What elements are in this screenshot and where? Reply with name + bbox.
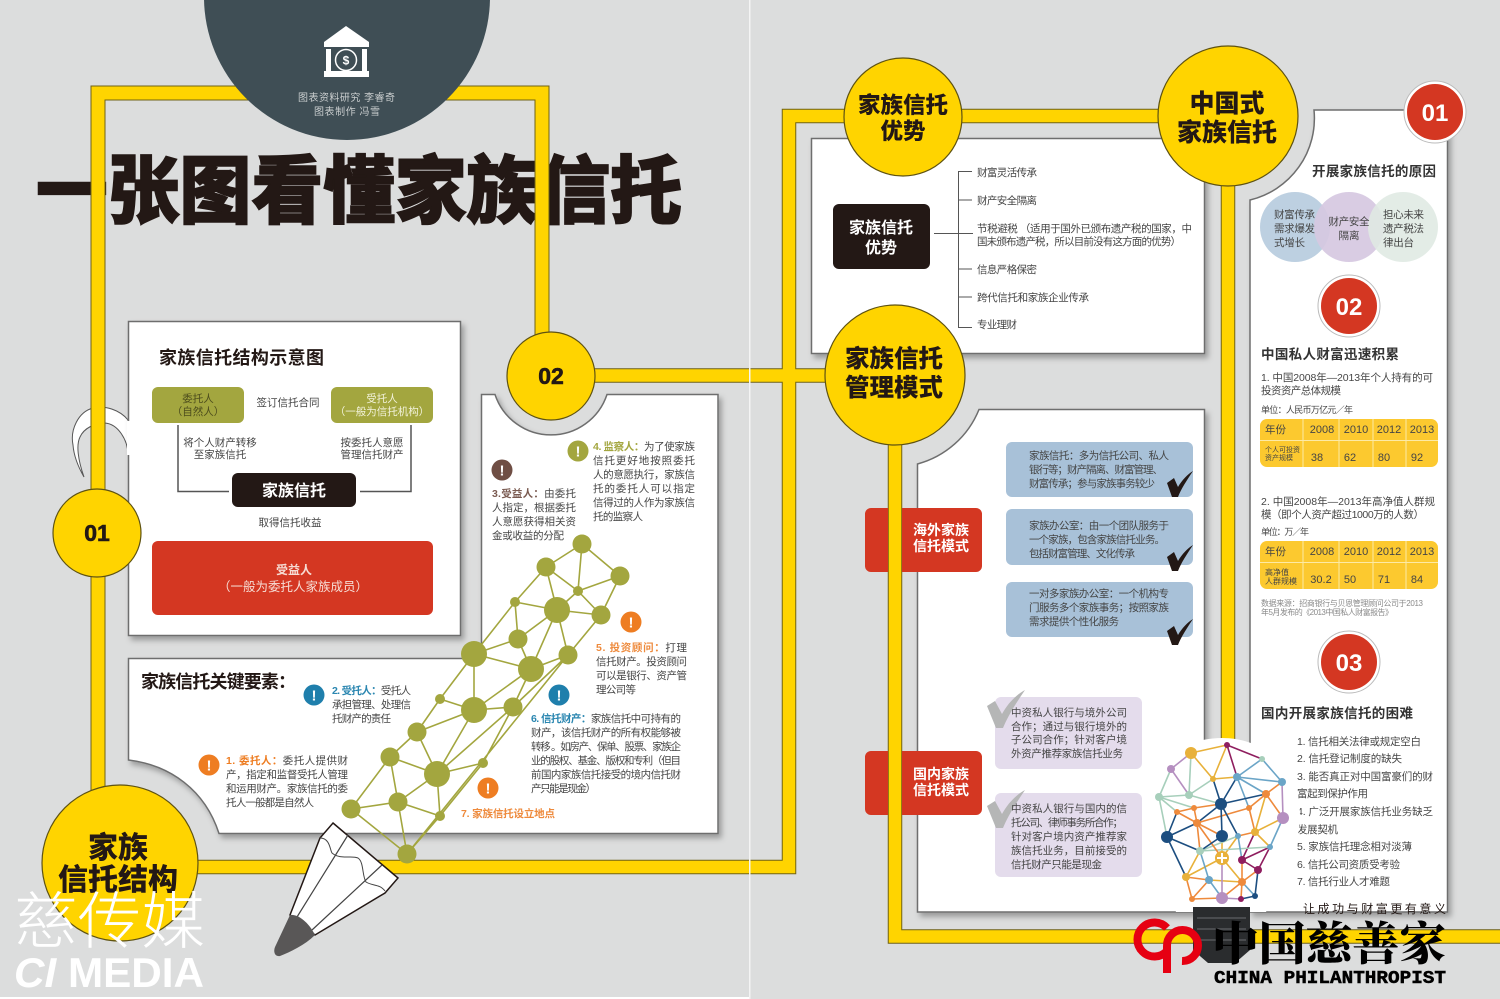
list: difficulties: 富起到保护作用	[1297, 787, 1368, 800]
watermark: CI Media: 慈传媒	[14, 871, 205, 961]
circle: China-style family trust: 家族信托	[1177, 118, 1277, 147]
element 5: investment adviser: 理公司等	[596, 683, 636, 696]
badge: 03: 03	[1336, 650, 1362, 677]
element 4: supervisor: 托的委托人可以指定	[593, 482, 696, 495]
element 4: supervisor: 人的意愿执行，家族信	[593, 468, 695, 481]
badge: 02: 02	[1336, 294, 1362, 321]
element 3: beneficiary: 金或收益的分配	[492, 529, 564, 542]
circle: management models: 家族信托	[845, 344, 943, 373]
panel: trust structure diagram: 至家族信托	[194, 448, 247, 461]
icon: bank	[324, 26, 369, 77]
table: assets: 38	[1311, 452, 1323, 464]
text: high net worth: 2. 中国2008年—2013年高净值人群规	[1261, 495, 1436, 508]
box: settlor: （自然人）	[172, 405, 224, 418]
heading: wealth: 中国私人财富迅速积累	[1261, 346, 1399, 362]
box: trustee: 受托人	[366, 392, 398, 405]
purple card 1	[987, 690, 1142, 769]
box: advantages: 优势	[865, 238, 897, 257]
advantages list: 财富灵活传承	[977, 166, 1038, 179]
text: data source	[1261, 598, 1424, 617]
panel: trust structure diagram: 签订信托合同	[256, 396, 320, 409]
element 6: trust property: !	[556, 688, 562, 704]
venn circles: reasons: 财产安全	[1328, 215, 1370, 228]
bulb socket	[1193, 907, 1250, 963]
advantages list: 国未颁布遗产税，所以目前没有这方面的优势）	[977, 235, 1181, 248]
table: high net worth: 71	[1378, 574, 1390, 586]
element 6: trust property: 6. 信托财产：家族信托中可持有的	[531, 712, 681, 725]
blue card 3: 门服务多个家族事务；按照家族	[1029, 601, 1170, 614]
element 2: trustee	[304, 684, 412, 725]
label: overseas model	[865, 508, 982, 572]
panel: trust structure diagram	[127, 322, 460, 636]
blue card 2: 包括财富管理、文化传承	[1029, 547, 1136, 560]
header badge with bank icon and credits: 图表资料研究 李睿奇	[298, 91, 395, 104]
purple card 1: 外资产推荐家族信托业务	[1011, 747, 1124, 760]
circle: management models	[825, 305, 965, 445]
purple card 2: 托公司、律师事务所合作；	[1011, 816, 1123, 829]
panel: trust structure diagram: 按委托人意愿	[340, 436, 404, 449]
list: difficulties: 4. 广泛开展家族信托业务缺乏	[1297, 805, 1434, 818]
purple card 1: 中资私人银行与境外公司	[1011, 706, 1127, 719]
heading: difficulties: 国内开展家族信托的困难	[1261, 705, 1414, 721]
label: overseas model: 信托模式	[913, 538, 969, 554]
purple card 2: 针对客户境内资产推荐家	[1011, 830, 1128, 843]
table: high net worth: 2010	[1344, 546, 1368, 558]
blue card 2: 一个家族，包含家族信托业务。	[1029, 533, 1165, 546]
advantages list: 节税避税 （适用于国外已颁布遗产税的国家，中	[977, 222, 1192, 235]
list: difficulties: 1. 信托相关法律或规定空白	[1297, 735, 1421, 748]
element 5: investment adviser	[596, 612, 688, 696]
table: high net worth: 2012	[1377, 546, 1401, 558]
element 5: investment adviser: 信托财产。投资顾问	[596, 655, 687, 668]
element 7: place of establishment: !	[486, 780, 490, 798]
text: assets: 单位：人民币万亿元／年	[1261, 404, 1353, 415]
panel: key elements	[128, 394, 718, 864]
badge: 02	[1318, 275, 1380, 337]
box: settlor: 委托人	[182, 392, 214, 405]
advantages list: 跨代信托和家族企业传承	[977, 291, 1090, 304]
blue card 2: 家族办公室：由一个团队服务于	[1029, 519, 1169, 532]
element 3: beneficiary: !	[500, 462, 504, 480]
badge: 01: 01	[1422, 100, 1448, 127]
text: high net worth: 模（即个人资产超过1000万的人数）	[1261, 508, 1424, 521]
venn circles: reasons: 需求爆发	[1274, 222, 1316, 235]
panel: trust structure diagram: 将个人财产转移	[183, 436, 257, 449]
element 4: supervisor: 4. 监察人：为了使家族	[593, 440, 696, 453]
element 6: trust property: 前国内家族信托接受的境内信托财	[531, 768, 681, 781]
panel: management models	[918, 410, 1204, 912]
text: assets: 投资资产总体规模	[1261, 384, 1342, 397]
element 4: supervisor: 信托更好地按照委托	[593, 454, 696, 467]
table: high net worth: 2008	[1310, 546, 1334, 558]
venn circles: reasons	[1260, 192, 1438, 262]
circle: 01: 01	[84, 520, 110, 546]
label: domestic model: 国内家族	[913, 766, 969, 782]
element 4: supervisor: 托的监察人	[593, 510, 644, 523]
element 1: settlor: 产，指定和监督受托人管理	[226, 768, 348, 781]
element 1: settlor	[198, 754, 348, 809]
logo: China Philanthropist: CHINA PHILANTHROPIST	[1214, 969, 1446, 989]
circle: family trust structure: 家族	[88, 831, 148, 865]
icon: pencil	[274, 823, 398, 956]
element 6: trust property: 产只能是现金）	[531, 782, 596, 795]
element 1: settlor: 和运用财产。家族信托的委	[226, 782, 348, 795]
venn circles: reasons: 担心未来	[1383, 209, 1424, 221]
panel: trust structure diagram: 取得信托收益	[258, 516, 322, 529]
purple card 1: 子公司合作；针对客户境	[1011, 733, 1127, 746]
label: domestic model: 信托模式	[913, 782, 969, 798]
element 1: settlor: !	[206, 758, 212, 774]
circle: 02: 02	[538, 363, 564, 389]
table: high net worth: 30.2	[1310, 574, 1332, 586]
crescent behind panel	[72, 407, 128, 477]
label: overseas model: 海外家族	[913, 522, 969, 538]
element 4: supervisor	[568, 440, 696, 523]
badge: 01	[1404, 81, 1466, 143]
blue card 2	[1006, 509, 1193, 571]
table: high net worth: 50	[1344, 574, 1356, 586]
text: data source: 年5月发布的《2013中国私人财富报告》	[1261, 607, 1393, 617]
circle: China-style family trust: 中国式	[1189, 90, 1265, 118]
advantages list: 专业理财	[977, 318, 1017, 331]
purple card 1: 合作；通过与银行境外的	[1011, 720, 1127, 733]
table: assets: 2008	[1310, 424, 1334, 436]
table: assets: 80	[1378, 452, 1390, 464]
element 2: trustee: 托财产的责任	[332, 712, 392, 725]
yellow connector lines	[98, 93, 1500, 936]
element 2: trustee: 承担管理、处理信	[332, 698, 411, 711]
list: difficulties: 3. 能否真正对中国富豪们的财	[1297, 770, 1433, 783]
element 3: beneficiary: 人指定，根据委托	[492, 501, 576, 514]
logo: China Philanthropist: 让成功与财富更有意义	[1303, 901, 1446, 916]
blue card 1	[1006, 442, 1193, 497]
list: difficulties: 7. 信托行业人才难题	[1297, 875, 1390, 888]
title: 一张图看懂家族信托	[36, 150, 682, 233]
text: high net worth: 单位：万／年	[1261, 526, 1309, 537]
element 6: trust property: 转移 。如房产、保单、股票、家族企	[531, 740, 682, 753]
table: high net worth	[1260, 541, 1438, 589]
purple card 2: 中资私人银行与国内的信	[1011, 802, 1127, 815]
list: difficulties: 2. 信托登记制度的缺失	[1297, 752, 1402, 765]
list: difficulties	[1297, 735, 1434, 888]
table: high net worth: 84	[1411, 574, 1423, 586]
box: family trust: 家族信托	[262, 481, 326, 500]
element 7: place of establishment: 7. 家族信托设立地点	[461, 807, 556, 820]
purple card 2	[987, 790, 1142, 877]
element 6: trust property	[531, 684, 682, 795]
table: assets: 62	[1344, 452, 1356, 464]
element 2: trustee: !	[312, 688, 316, 704]
element 7: place of establishment	[461, 778, 556, 820]
table: high net worth: 人群规模	[1265, 576, 1297, 586]
advantages list: 财产安全隔离	[977, 194, 1037, 207]
venn circles: reasons: 隔离	[1338, 229, 1360, 242]
watermark: CI Media: CI MEDIA	[14, 949, 204, 996]
venn circles: reasons: 式增长	[1274, 236, 1306, 249]
header badge with bank icon and credits	[204, 0, 490, 140]
purple card 2: 族信托业务，目前接受的	[1011, 844, 1127, 857]
venn circles: reasons: 遗产税法	[1383, 222, 1424, 235]
element 4: supervisor: 信得过的人作为家族信	[593, 496, 695, 509]
list: difficulties: 发展契机	[1297, 823, 1338, 836]
text: assets: 1. 中国2008年—2013年个人持有的可	[1261, 371, 1433, 384]
element 3: beneficiary	[492, 460, 576, 542]
table: assets: 年份	[1265, 423, 1286, 436]
text: assets	[1261, 371, 1433, 415]
blue card 1: 家族信托：多为信托公司、私人	[1029, 449, 1170, 462]
box: trustee	[331, 387, 433, 423]
venn circles: reasons: 律出台	[1383, 236, 1414, 249]
box: beneficiary	[152, 541, 433, 615]
panel: advantages	[812, 138, 1204, 354]
panel: trust structure diagram: 管理信托财产	[340, 448, 404, 461]
network diagram	[342, 534, 630, 864]
heading: reasons: 开展家族信托的原因	[1312, 163, 1436, 179]
venn circles: reasons: 财富传承	[1274, 208, 1316, 221]
table: assets: 2013	[1410, 424, 1434, 436]
blue card 3	[1006, 582, 1193, 645]
element 4: supervisor: !	[576, 444, 580, 460]
element 5: investment adviser: !	[628, 614, 634, 632]
circle: family trust structure	[42, 785, 198, 941]
circle: 02	[507, 332, 595, 420]
advantages tree lines	[934, 172, 973, 328]
element 2: trustee: 2. 受托人：受托人	[332, 684, 412, 697]
element 1: settlor: 托人一般都是自然人	[226, 796, 314, 809]
table: assets	[1260, 419, 1438, 467]
header badge with bank icon and credits: 图表制作 冯雪	[314, 105, 380, 118]
advantages list	[977, 166, 1192, 331]
list: difficulties: 5. 家族信托理念相对淡薄	[1297, 840, 1412, 853]
text: high net worth	[1261, 495, 1436, 537]
blue card 1: 财富传承；参与家族事务较少	[1029, 477, 1155, 490]
box: settlor	[152, 387, 244, 423]
element 3: beneficiary: 3.受益人：由委托	[492, 487, 576, 500]
box: advantages: 家族信托	[849, 218, 913, 237]
blue card 1: 银行等；财产隔离、财富管理、	[1029, 463, 1163, 476]
box: trustee: （一般为信托机构）	[335, 405, 429, 418]
label: domestic model	[865, 751, 982, 815]
element 3: beneficiary: 人意愿获得相关资	[492, 515, 576, 528]
table: assets: 个人可投资	[1265, 445, 1300, 454]
table: assets: 2010	[1344, 424, 1368, 436]
table: assets: 2012	[1377, 424, 1401, 436]
badge: 03	[1318, 631, 1380, 693]
circle: trust advantages: 家族信托	[858, 92, 948, 118]
element 5: investment adviser: 可以是银行、资产管	[596, 669, 687, 682]
table: assets: 92	[1411, 452, 1423, 464]
element 5: investment adviser: 5. 投资顾问：打理	[596, 641, 688, 654]
element 6: trust property: 业的股权、基金、版权和专利（但目	[531, 754, 681, 767]
circle: trust advantages: 优势	[880, 119, 926, 144]
list: difficulties: 6. 信托公司资质受考验	[1297, 858, 1400, 871]
box: family trust	[232, 473, 356, 507]
advantages list: 信息严格保密	[977, 263, 1038, 276]
element 1: settlor: 1. 委托人：委托人提供财	[226, 754, 348, 767]
blue card 3: 需求提供个性化服务	[1029, 615, 1120, 628]
purple card 2: 信托财产只能是现金	[1011, 858, 1102, 871]
box: advantages	[833, 204, 930, 269]
heading: structure diagram: 家族信托结构示意图	[159, 347, 324, 368]
circle: trust advantages	[844, 58, 962, 176]
box: beneficiary: （一般为委托人家族成员）	[218, 579, 368, 594]
circle: management models: 管理模式	[845, 373, 943, 402]
connector lines	[178, 425, 411, 492]
table: assets: 资产规模	[1265, 453, 1293, 462]
element 6: trust property: 财产，该信托财产的所有权能够被	[531, 726, 682, 739]
logo: China Philanthropist	[1137, 901, 1446, 989]
circle: family trust structure: 信托结构	[58, 864, 178, 897]
table: high net worth: 高净值	[1265, 567, 1289, 577]
circle: 01	[53, 489, 141, 577]
panel: China-style family trust	[1250, 81, 1466, 912]
icon: light bulb network	[1142, 738, 1300, 963]
table: high net worth: 2013	[1410, 546, 1434, 558]
box: beneficiary: 受益人	[276, 562, 312, 577]
text: data source: 数据来源：招商银行与贝恩管理顾问公司于2013	[1261, 598, 1424, 608]
heading: key elements: 家族信托关键要素：	[141, 671, 296, 692]
blue card 3: 一对多家族办公室：一个机构专	[1029, 587, 1169, 600]
table: high net worth: 年份	[1265, 545, 1286, 558]
icon: bank: $	[343, 54, 350, 68]
circle: China-style family trust	[1158, 46, 1298, 186]
logo: China Philanthropist: 中国慈善家	[1212, 908, 1446, 974]
